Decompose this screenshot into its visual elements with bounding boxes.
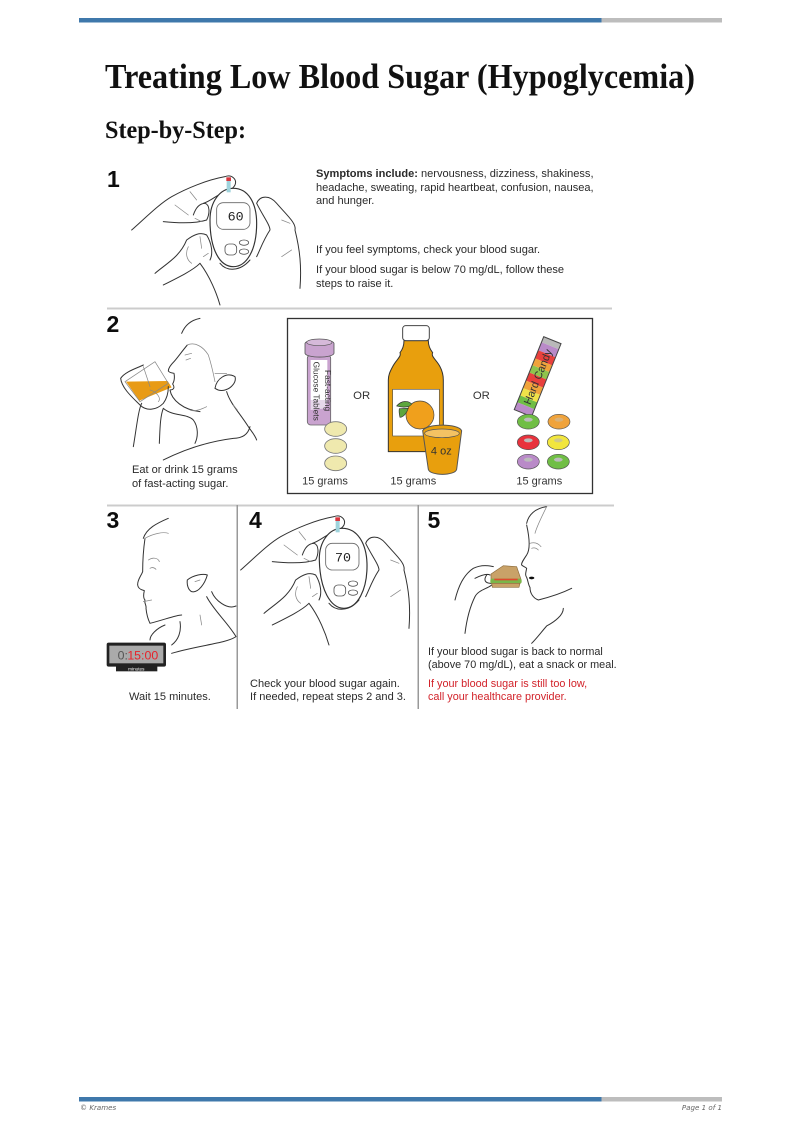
step 1 number: 1 [107,166,120,192]
check blood sugar text: If you feel symptoms, check your blood sugar. [316,244,540,256]
eat or drink text: of fast-acting sugar. [132,478,228,490]
symptoms text: headache, sweating, rapid heartbeat, confusion, nausea, [316,182,594,194]
15 grams labels: 15 grams [302,475,348,487]
icon: hands holding glucose meter reading 70: 70 [335,551,351,566]
step 1 panel [107,166,594,305]
icon: digital timer showing 0:15:00: minutes [128,666,145,671]
step 3 panel [106,507,236,703]
eat or drink text: Eat or drink 15 grams [132,464,238,476]
step 5 panel [428,507,617,703]
icon: digital timer showing 0:15:00 [107,643,166,671]
icon: hands holding glucose meter reading 70 [241,516,410,645]
15 grams labels [302,475,563,487]
step-by-step illustration [106,166,617,709]
15 grams labels: 15 grams [516,475,563,487]
footer bar [79,1097,722,1102]
back to normal text: If your blood sugar is back to normal [428,646,603,658]
icon: hard candy roll and candies [514,337,570,469]
warning text: If your blood sugar is still too low, [428,678,587,690]
title: Treating Low Blood Sugar (Hypoglycemia) [105,57,695,96]
icon: glucose tablets tube: Glucose Tablets [311,362,321,421]
step 4 panel [241,507,410,703]
icon: hands holding glucose meter reading 60 [132,176,301,305]
icon: digital timer showing 0:15:00: 0: [118,649,128,663]
icon: glucose tablets tube [305,339,347,471]
footer page number: Page 1 of 1 [682,1103,722,1112]
below 70 mg/dL text: steps to raise it. [316,278,393,290]
icon: person eating a sandwich [455,507,572,643]
icon: digital timer showing 0:15:00: 15:00 [127,649,158,663]
footer copyright: © Krames [80,1103,117,1112]
first OR: OR [353,390,370,402]
15 grams labels: 15 grams [390,475,437,487]
icon: glucose tablets tube: Fast-acting [323,370,333,412]
step 2 panel [106,311,592,494]
check again text: If needed, repeat steps 2 and 3. [250,691,406,703]
below 70 mg/dL text: If your blood sugar is below 70 mg/dL, follow these [316,264,564,276]
icon: person waiting in profile [138,518,236,653]
check again text: Check your blood sugar again. [250,678,400,690]
panel: fast-acting sugar options [288,318,592,494]
warning text: call your healthcare provider. [428,691,567,703]
symptoms text: Symptoms include: nervousness, dizziness, shakiness, [316,168,594,180]
icon: person drinking a glass of juice [121,318,257,460]
top header bar [79,18,722,22]
subheading: Step-by-Step: [105,117,246,144]
step 5 number: 5 [428,507,440,533]
icon: orange juice bottle and glass: 4 oz [431,445,452,457]
icon: orange juice bottle and glass [388,326,462,474]
icon: hands holding glucose meter reading 60: 60 [228,211,244,226]
second OR: OR [473,390,490,402]
step 4 number: 4 [249,507,262,533]
back to normal text: (above 70 mg/dL), eat a snack or meal. [428,659,617,671]
step 3 number: 3 [106,507,119,533]
step 2 number: 2 [106,311,119,337]
wait text: Wait 15 minutes. [129,691,211,703]
icon: hard candy roll and candies: Hard Candy [522,347,555,406]
symptoms text: and hunger. [316,195,374,207]
